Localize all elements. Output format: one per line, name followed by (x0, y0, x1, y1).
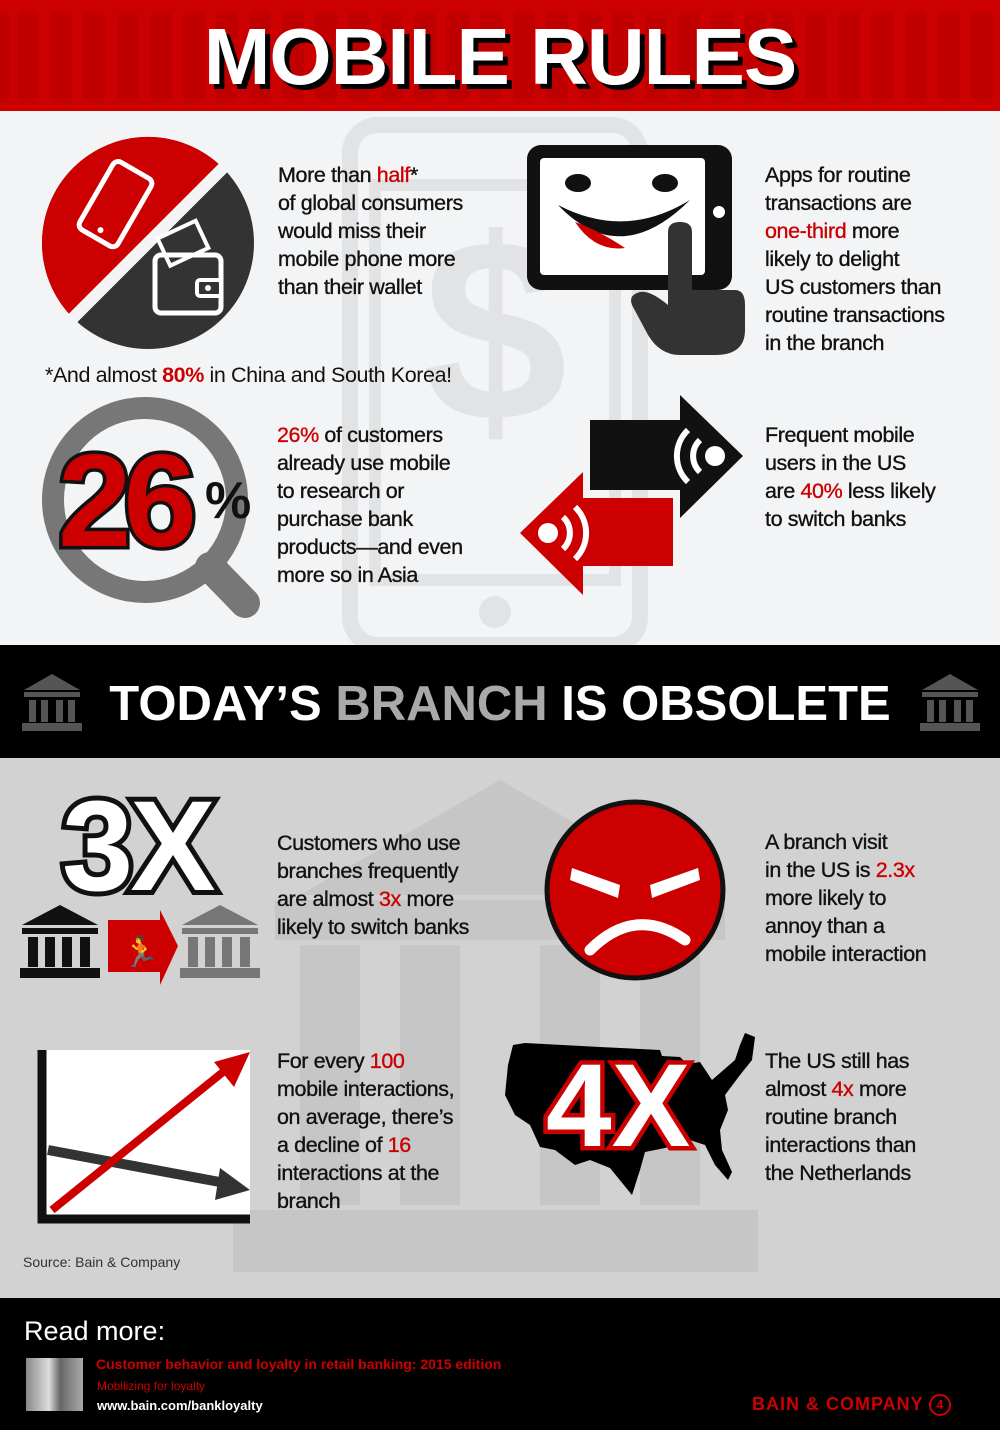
text: branches frequently 3x (277, 831, 469, 939)
footer band (0, 1298, 1000, 1430)
text: apps for routine transactions: transactions are (765, 191, 912, 215)
icon: magnifier 26%: 26 (58, 427, 192, 574)
text: every 100 mobile interactions: on average, there’s (277, 1105, 453, 1129)
icon: magnifier 26% (53, 408, 251, 603)
text: half of global consumers: More than half* (278, 163, 418, 187)
icon: swap arrows (520, 395, 743, 595)
text: US 4x Netherlands: interactions than (765, 1133, 916, 1157)
text: frequent mobile users: are 40% less likely (765, 479, 935, 503)
black band (0, 645, 1000, 758)
heading text: TODAY’S BRANCH IS OBSOLETE (109, 677, 891, 731)
text: apps for routine transactions: US customers than (765, 275, 941, 299)
text: branch visit 2.3x: in the US is 2.3x (765, 858, 915, 882)
chart: lines (42, 1050, 250, 1219)
text: branch visit 2.3x: mobile interaction (765, 942, 926, 966)
icon: bank right (920, 674, 980, 731)
text: US 4x Netherlands: routine branch (765, 1105, 897, 1129)
text: apps for routine transactions: likely to delight (765, 247, 899, 271)
text: branch visit 2.3x: more likely to (765, 886, 886, 910)
thumbnail (26, 1358, 83, 1411)
text: frequent mobile users: users in the US (765, 451, 906, 475)
text: apps for routine transactions: one-third more (765, 219, 899, 243)
subtitle: Mobilizing for loyalty (97, 1379, 205, 1393)
text: apps for routine transactions: routine transactions (765, 303, 945, 327)
text: half of global consumers: would miss their (278, 219, 426, 243)
text: branches frequently 3x: branches frequently (277, 859, 458, 883)
text: 26% of customers: 26% of customers (277, 423, 443, 447)
text: every 100 mobile interactions: a decline of 16 (277, 1133, 411, 1157)
text: every 100 mobile interactions: branch (277, 1189, 340, 1213)
section heading: branch obsolete (22, 674, 980, 731)
text: branches frequently 3x: likely to switch banks (277, 915, 469, 939)
text: half of global consumers (278, 163, 463, 299)
text: branches frequently 3x: Customers who use (277, 831, 460, 855)
text: branch visit 2.3x: A branch visit (765, 830, 887, 854)
icon: tablet smiley with hand (527, 145, 745, 355)
text: frequent mobile users: Frequent mobile (765, 423, 914, 447)
text: footnote 80%: *And almost 80% in China and South Korea! (45, 363, 452, 387)
text: apps for routine transactions: Apps for routine (765, 163, 910, 187)
icon: US map 4X: 4X (546, 1040, 690, 1172)
text: 26% of customers: purchase bank (277, 507, 413, 531)
text: half of global consumers: than their wallet (278, 275, 422, 299)
header band (0, 0, 1000, 111)
source: Source: Bain & Company (23, 1254, 180, 1270)
faint bank building (233, 780, 758, 1272)
footer (24, 1316, 951, 1416)
logo: 4 (936, 1397, 944, 1412)
url: www.bain.com/bankloyalty (97, 1398, 263, 1413)
icon: US map 4X (505, 1033, 755, 1195)
text: every 100 mobile interactions: mobile interactions, (277, 1077, 454, 1101)
text: 26% of customers: products—and even (277, 535, 463, 559)
title: MOBILE RULES (204, 12, 796, 101)
faint phone with dollar (350, 125, 640, 645)
text: frequent mobile users (765, 423, 936, 531)
faint phone with dollar: $ (423, 186, 567, 476)
text: branch visit 2.3x (764, 830, 926, 966)
logo: BAIN & COMPANY (752, 1394, 923, 1414)
text: branch visit 2.3x: annoy than a (765, 914, 885, 938)
icon: phone vs wallet circle (42, 137, 254, 349)
icon: 3X with banks: 3X (62, 775, 215, 918)
text: US 4x Netherlands: almost 4x more (765, 1077, 906, 1101)
text: 26% of customers: more so in Asia (277, 563, 418, 587)
text: 26% of customers: to research or (277, 479, 404, 503)
text: every 100 mobile interactions (277, 1049, 454, 1213)
icon: 3X with banks (20, 775, 260, 985)
read more heading: Read more: (24, 1316, 165, 1346)
text: 26% of customers (277, 423, 463, 587)
icon: bank left (22, 674, 82, 731)
text: every 100 mobile interactions: For every 100 (277, 1049, 404, 1073)
text: half of global consumers: of global consumers (278, 191, 463, 215)
icon: 3X with banks: 🏃 (122, 934, 159, 969)
text: US 4x Netherlands: the Netherlands (765, 1161, 911, 1185)
text: US 4x Netherlands: The US still has (765, 1049, 909, 1073)
text: branches frequently 3x: are almost 3x more (277, 887, 454, 911)
text: 26% of customers: already use mobile (277, 451, 450, 475)
gray section (0, 758, 1000, 1298)
text: apps for routine transactions (764, 163, 945, 355)
text: apps for routine transactions: in the branch (765, 331, 884, 355)
icon: angry face (547, 802, 723, 978)
report title: Customer behavior and loyalty in retail banking: 2015 edition (96, 1356, 501, 1372)
text: every 100 mobile interactions: interactions at the (277, 1161, 439, 1185)
icon: magnifier 26%: % (205, 472, 251, 530)
text: US 4x Netherlands (765, 1049, 916, 1185)
text: half of global consumers: mobile phone more (278, 247, 455, 271)
text: frequent mobile users: to switch banks (765, 507, 906, 531)
